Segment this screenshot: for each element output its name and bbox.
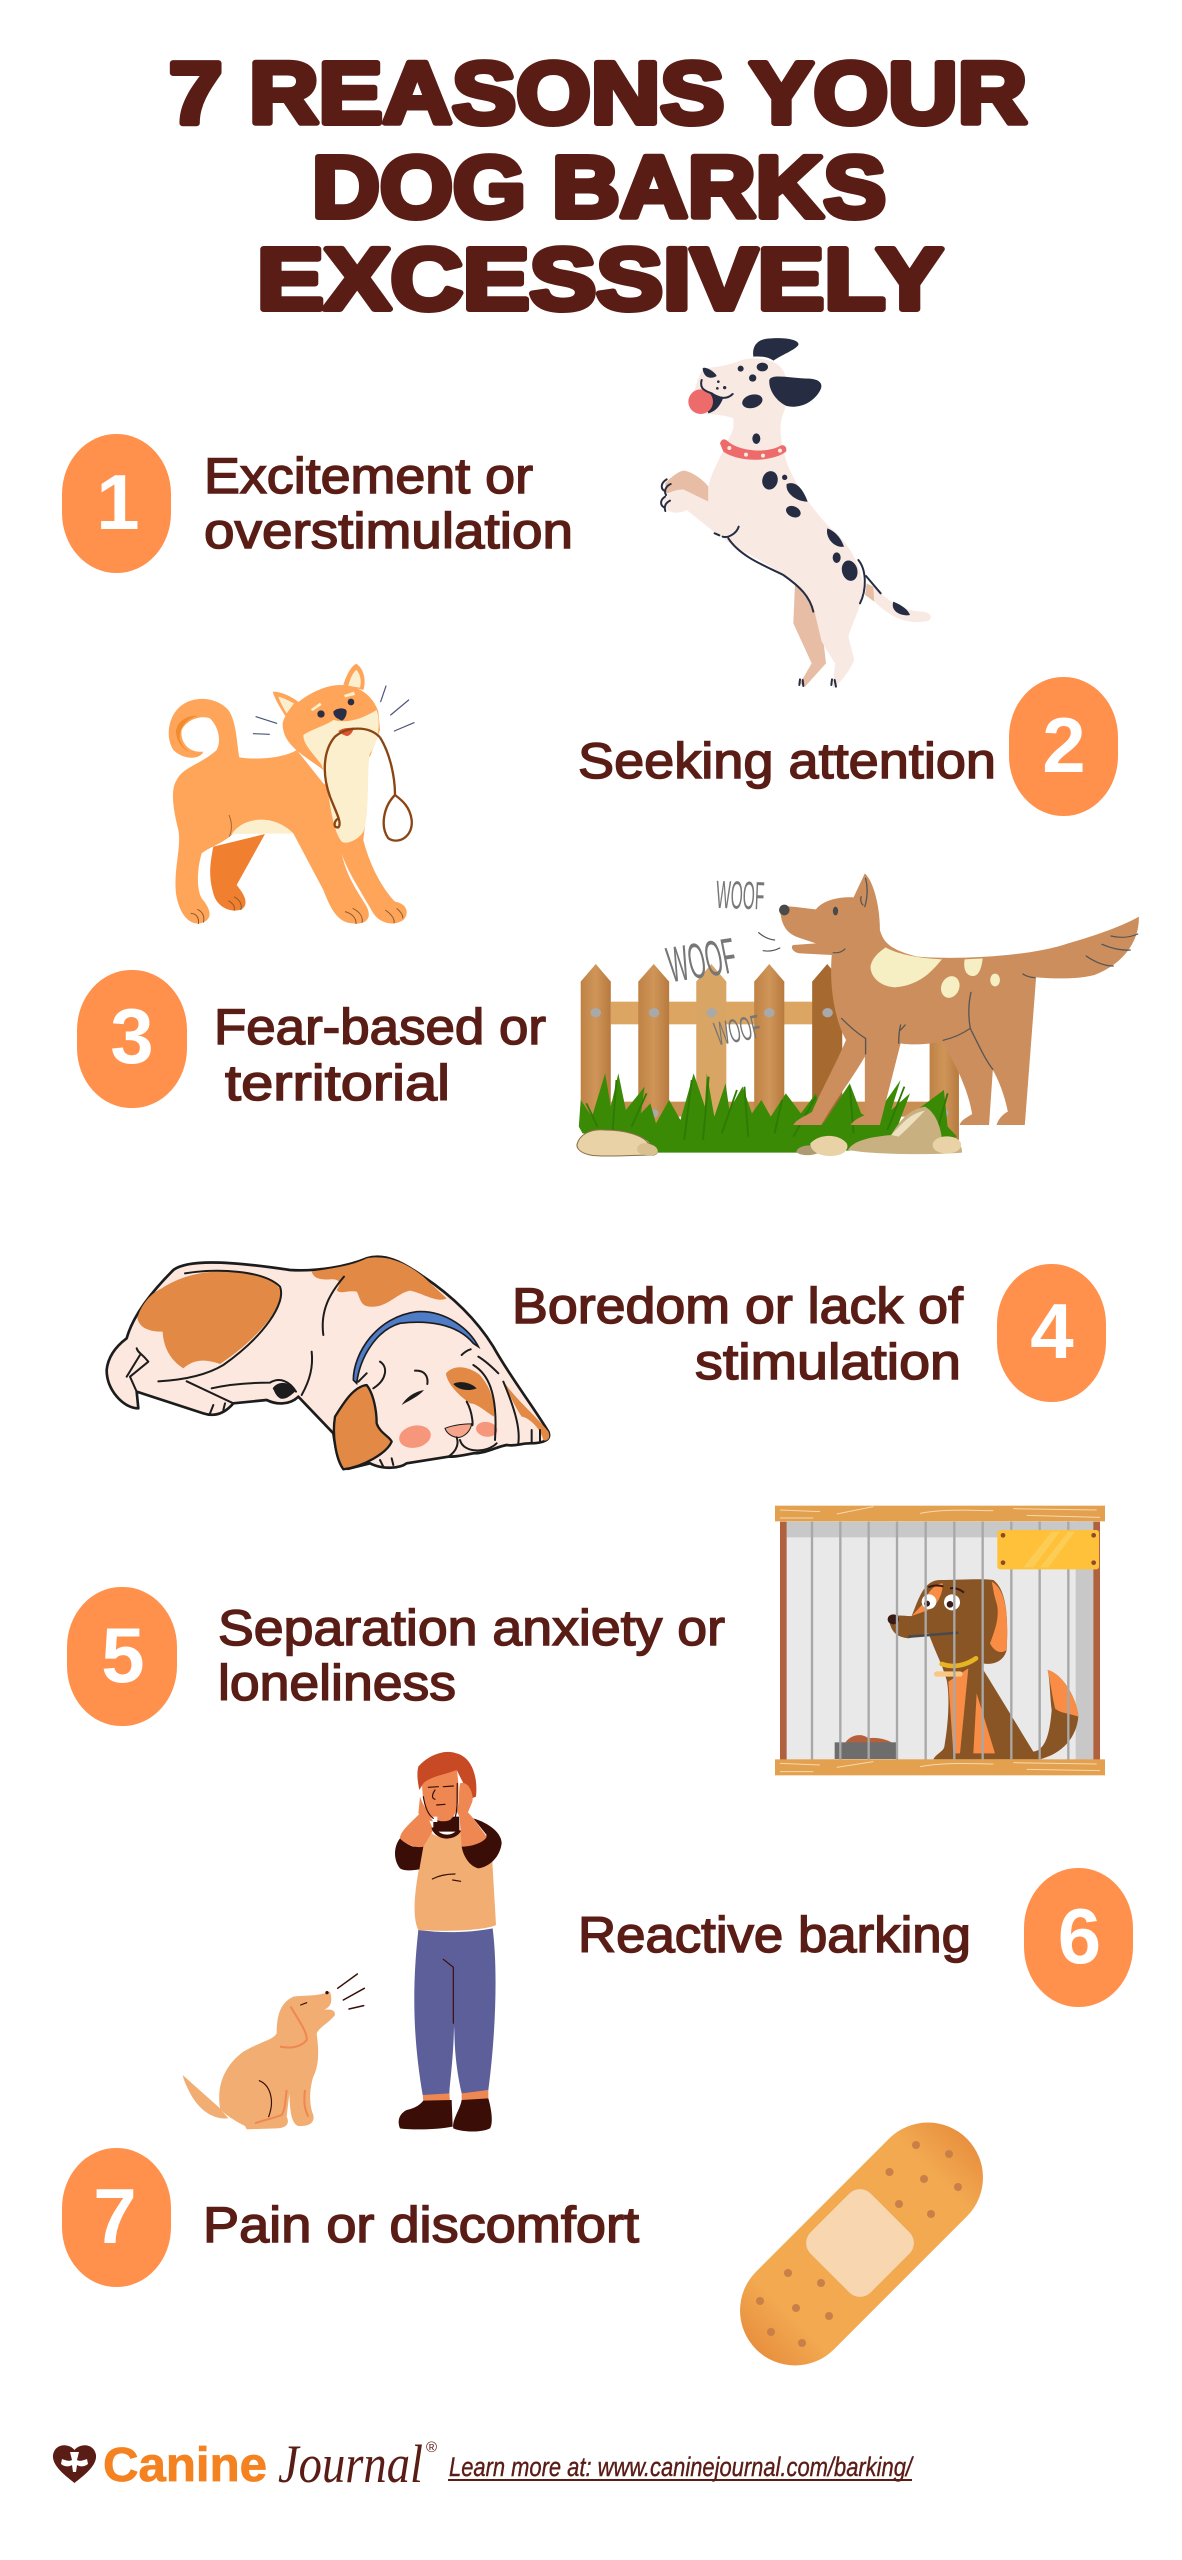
- reason 4: boredom: Boredom or lack of: [512, 1278, 963, 1334]
- icon: jumping dalmatian: [661, 338, 931, 688]
- rocks: [577, 1107, 962, 1156]
- reason 4: boredom: [512, 1264, 1106, 1402]
- reason 4: boredom: stimulation: [695, 1334, 961, 1390]
- food bowl: [835, 1735, 896, 1759]
- reason 1: excitement: overstimulation: [204, 503, 573, 559]
- reason 1: excitement: Excitement or: [204, 448, 533, 504]
- reason 5: separation anxiety: 5: [101, 1611, 145, 1699]
- icon: bandage: [717, 2100, 1006, 2388]
- puppy: [183, 1974, 364, 2129]
- reason 6: reactive barking: 6: [1058, 1892, 1101, 1980]
- footer link: Learn more at: www.caninejournal.com/barking/: [449, 2452, 914, 2482]
- title: EXCESSIVELY: [257, 231, 943, 328]
- footer logo: Journal: [278, 2434, 423, 2494]
- icon: barking dog at fence: [577, 872, 1139, 1156]
- man: [395, 1752, 502, 2131]
- wooden frame: [775, 1506, 1105, 1775]
- icon: dog in cage: [775, 1506, 1105, 1775]
- title: DOG BARKS: [312, 139, 886, 236]
- bars: [812, 1522, 1068, 1760]
- bark words: WOOF: [663, 928, 741, 993]
- title: [169, 45, 1027, 328]
- reason 5: separation anxiety: Separation anxiety or: [218, 1600, 725, 1656]
- icon: heart paw: [53, 2445, 96, 2483]
- reason 1: excitement: 1: [96, 458, 140, 546]
- reason 1: excitement: [62, 434, 573, 573]
- title: 7 REASONS YOUR: [169, 45, 1027, 142]
- reason 7: pain or discomfort: Pain or discomfort: [203, 2197, 639, 2253]
- bark words: [663, 872, 765, 1053]
- reason 5: separation anxiety: [67, 1587, 725, 1726]
- icon: sleeping dog: [107, 1257, 549, 1469]
- footer logo: Canine: [103, 2439, 267, 2492]
- reason 7: pain or discomfort: [62, 2148, 639, 2287]
- icon: barking dog at fence: WOOF: [715, 872, 765, 918]
- reason 4: boredom: 4: [1030, 1287, 1074, 1375]
- reason 6: reactive barking: [578, 1868, 1133, 2007]
- footer logo: [53, 2434, 437, 2494]
- reason 3: fear-based or territorial: territorial: [225, 1055, 450, 1111]
- dog body: [780, 873, 1139, 1125]
- icon: barking dog at fence: WOOF: [711, 1008, 765, 1053]
- footer logo: ®: [426, 2439, 437, 2456]
- name plate: [997, 1530, 1099, 1569]
- reason 5: separation anxiety: loneliness: [218, 1655, 456, 1711]
- reason 3: fear-based or territorial: Fear-based or: [214, 999, 546, 1055]
- icon: man covering ears and barking puppy: [183, 1752, 502, 2131]
- reason 7: pain or discomfort: 7: [93, 2172, 137, 2260]
- icon: shiba with leash: [169, 664, 414, 924]
- reason 3: fear-based or territorial: [77, 970, 546, 1111]
- reason 3: fear-based or territorial: 3: [110, 992, 154, 1080]
- reason 2: seeking attention: 2: [1042, 701, 1086, 789]
- grass: [579, 1073, 957, 1153]
- reason 6: reactive barking: Reactive barking: [578, 1907, 971, 1963]
- reason 2: seeking attention: Seeking attention: [578, 733, 996, 789]
- reason 2: seeking attention: [578, 677, 1118, 816]
